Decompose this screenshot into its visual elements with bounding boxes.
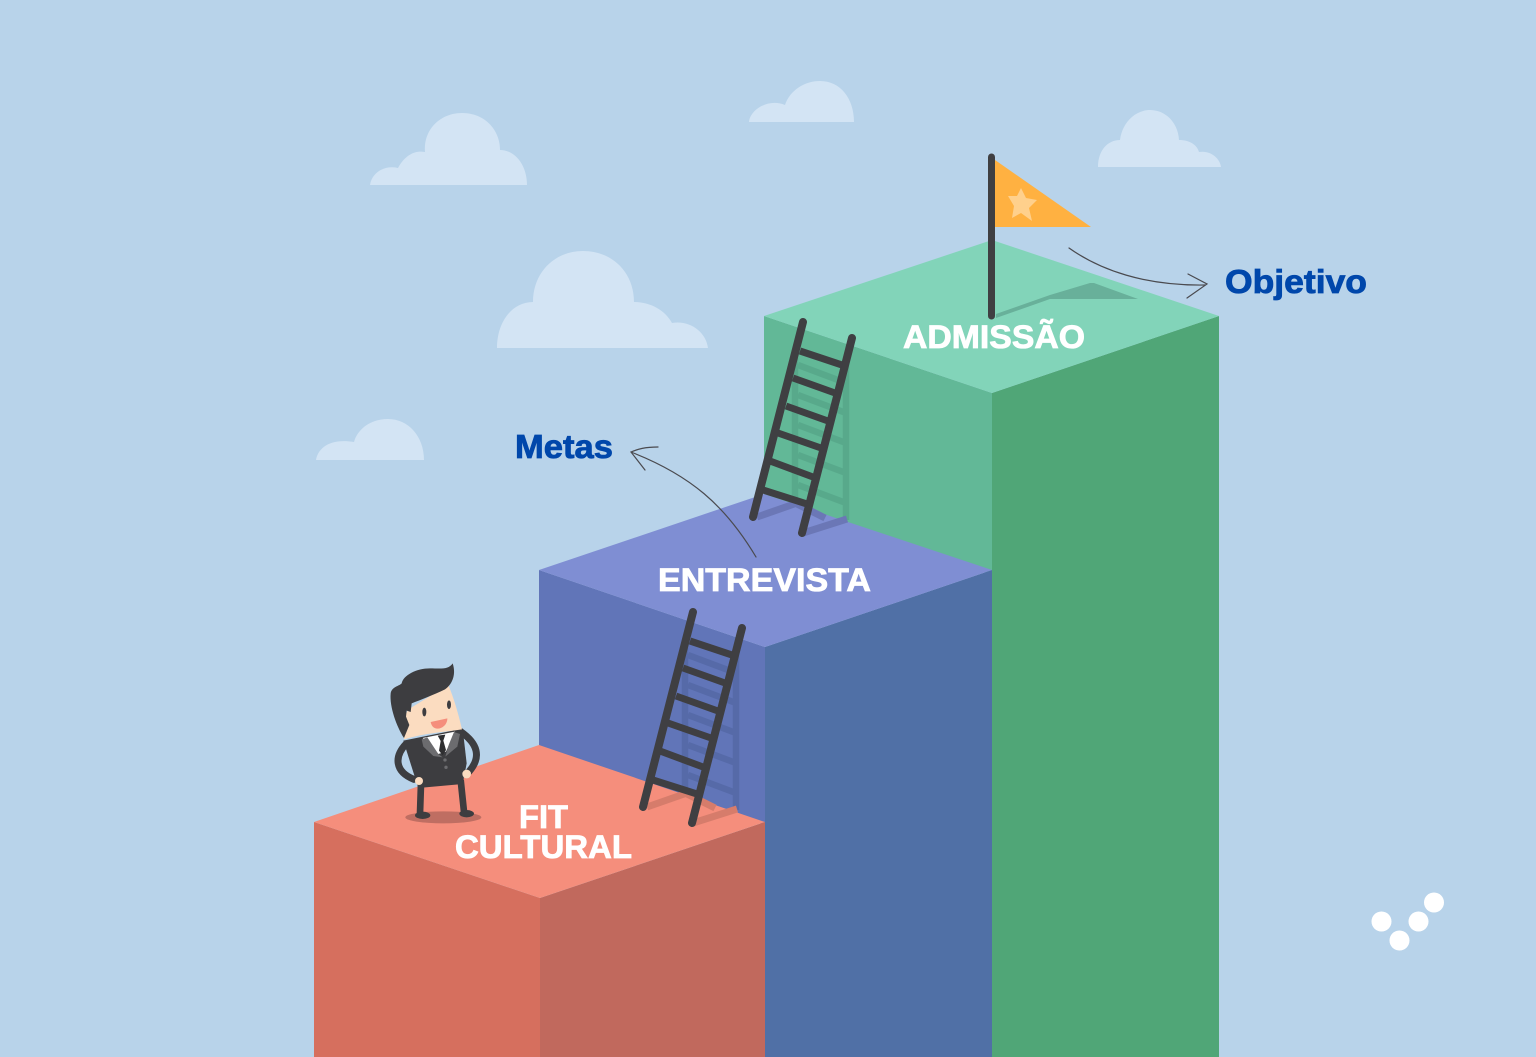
green column: Admissão bbox=[764, 240, 1219, 1057]
ladder shadow: upper bbox=[795, 358, 846, 520]
ladder floor shadow: upper bbox=[757, 503, 847, 533]
logo: white dots bbox=[1372, 892, 1444, 950]
ladder: lower bbox=[643, 612, 742, 823]
step title: Fit Cultural: CULTURAL bbox=[455, 829, 632, 865]
clouds bbox=[316, 81, 1221, 460]
arrow: to Objetivo bbox=[1069, 248, 1207, 298]
red column: Fit Cultural bbox=[314, 745, 765, 1057]
label: Objetivo: Objetivo bbox=[1225, 263, 1367, 300]
arrow: to Metas bbox=[631, 447, 756, 557]
ladder: upper bbox=[753, 322, 852, 533]
step title: Fit Cultural bbox=[455, 799, 632, 865]
character: businessman bbox=[391, 663, 481, 823]
label: Metas: Metas bbox=[515, 428, 613, 465]
ladder floor shadow: lower bbox=[647, 793, 737, 823]
flag bbox=[992, 157, 1091, 316]
blue column: Entrevista bbox=[539, 494, 992, 1057]
step title: Entrevista: ENTREVISTA bbox=[658, 562, 871, 598]
step title: Admissão: ADMISSÃO bbox=[903, 319, 1085, 355]
ladder shadow: lower bbox=[685, 648, 736, 810]
flag shadow bbox=[996, 283, 1138, 318]
step title: Fit Cultural: FIT bbox=[519, 799, 568, 835]
